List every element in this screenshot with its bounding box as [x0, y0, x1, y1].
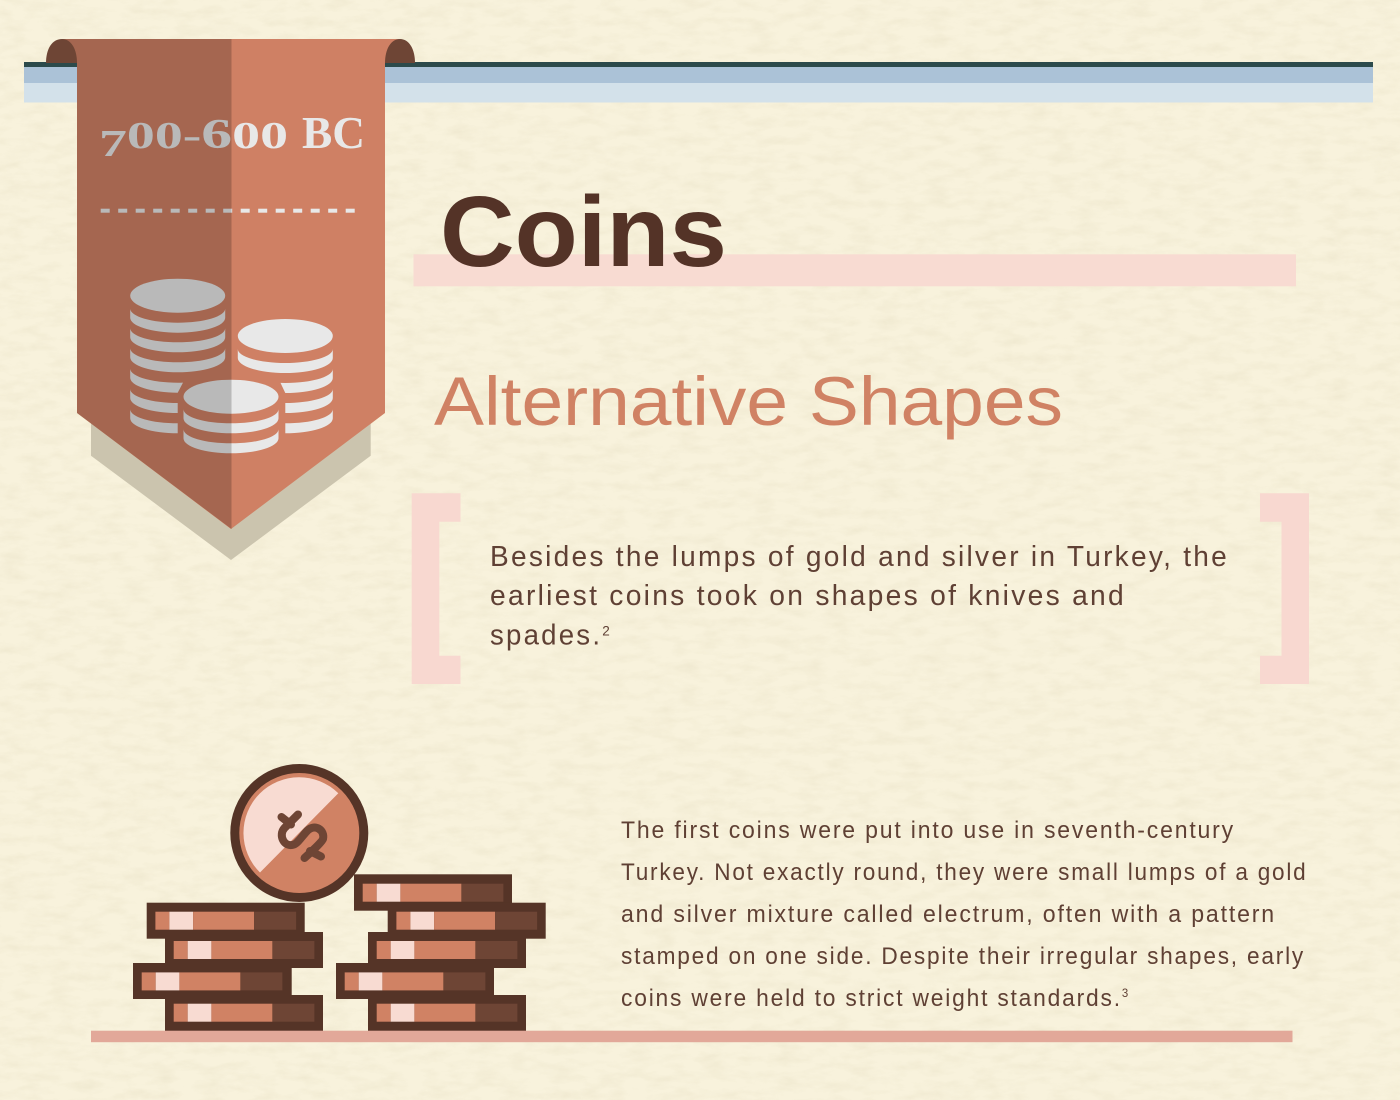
date ribbon banner: [46, 39, 415, 560]
icon: coin stacks: [130, 279, 333, 453]
date label: 00-: [127, 115, 201, 157]
ribbon body: [62, 39, 400, 529]
left ribbon curl: [46, 39, 77, 63]
dollar coin: [235, 768, 364, 898]
callout text: spades.: [490, 620, 606, 652]
right ribbon curl: [385, 39, 415, 63]
heading underline: [414, 254, 1296, 286]
front coin stack: [184, 380, 278, 453]
callout text: 2: [602, 622, 612, 638]
body paragraph: [621, 817, 1308, 1012]
body paragraph: Turkey. Not exactly round, they were small lumps of a gold: [621, 859, 1308, 886]
right bracket: [1260, 493, 1309, 684]
title: Coins: [440, 176, 727, 288]
icon: stacked coins illustration: [133, 768, 546, 1031]
body paragraph: and silver mixture called electrum, often with a pattern: [621, 901, 1276, 928]
body paragraph: coins were held to strict weight standards.: [621, 985, 1148, 1012]
left bracket: [412, 493, 460, 684]
tall coin stack: [130, 279, 225, 433]
callout text: [490, 541, 1229, 652]
date label: [99, 108, 365, 165]
date label: 7: [99, 123, 127, 165]
right bar stack: [336, 874, 546, 1031]
ground line: [91, 1031, 1292, 1042]
callout text: Besides the lumps of gold and silver in Turkey, the: [490, 541, 1229, 573]
body paragraph: The first coins were put into use in seventh-century: [621, 817, 1235, 844]
subtitle: Alternative Shapes: [434, 363, 1063, 440]
body paragraph: 3: [1122, 986, 1130, 1000]
top striped bar: [24, 62, 1373, 102]
ribbon drop shadow: [91, 420, 371, 560]
date label: 6 00: [201, 112, 270, 158]
left bar stack: [133, 903, 323, 1031]
body paragraph: stamped on one side. Despite their irregular shapes, early: [621, 943, 1305, 970]
dashed divider: [101, 209, 355, 213]
ribbon shaded left half: [62, 39, 232, 529]
right coin stack: [238, 319, 333, 433]
date label: BC: [302, 108, 365, 158]
callout text: earliest coins took on shapes of knives and: [490, 580, 1126, 612]
